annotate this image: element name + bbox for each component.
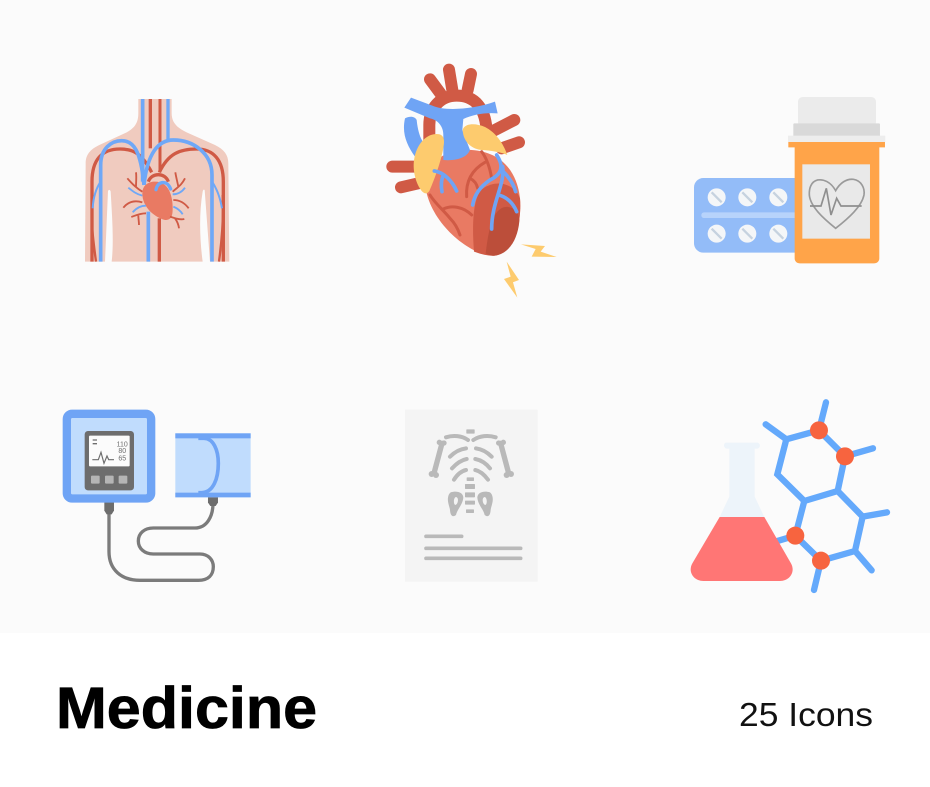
cable (109, 503, 213, 580)
ribs (446, 436, 496, 480)
icon: flask and molecule (691, 402, 887, 590)
monitor device: 110 (117, 441, 128, 448)
icon: blood pressure monitor (63, 410, 251, 580)
monitor device (63, 410, 155, 503)
bottle (788, 97, 885, 263)
icon: pill blister and medicine bottle (694, 97, 885, 263)
flask (691, 443, 793, 581)
cuff (175, 433, 251, 497)
icon: circulatory system torso (85, 99, 229, 262)
monitor device: 80 (118, 448, 126, 455)
icon count: 25 Icons (739, 696, 873, 733)
blister pack (694, 178, 804, 253)
icon: anatomical heart (392, 70, 557, 298)
icon: x-ray sheet (405, 410, 538, 582)
title: Medicine (56, 676, 317, 741)
arm bones (434, 443, 442, 473)
molecule (766, 402, 887, 590)
report lines (426, 536, 521, 558)
monitor device: 65 (118, 456, 126, 463)
